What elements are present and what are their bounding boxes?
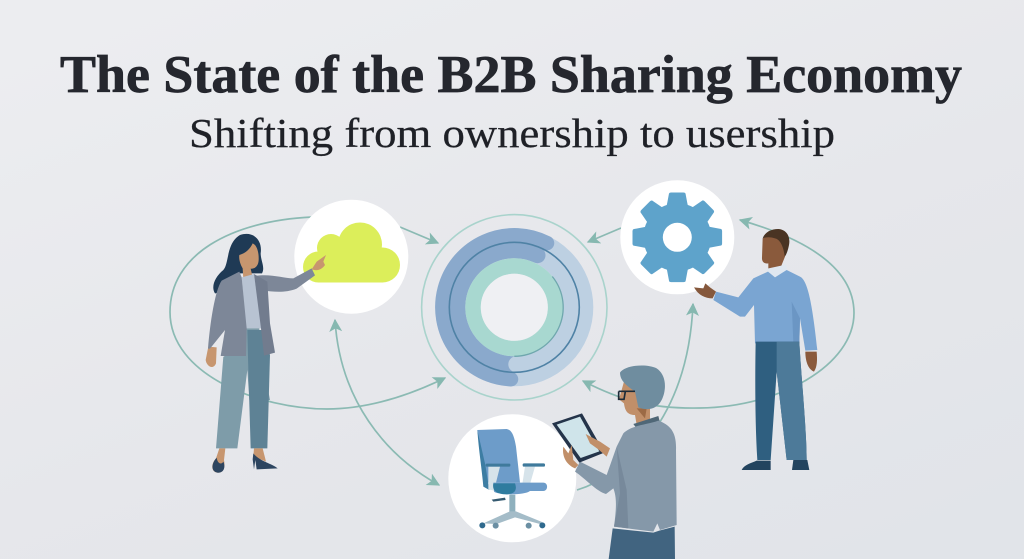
connecting arrows [170,217,854,490]
figure: man presenting gear [694,229,817,470]
central ring diagram [422,215,607,400]
figure: woman pointing at cloud [206,234,326,473]
title: The State of the B2B Sharing Economy [60,46,962,104]
icon: office chair [448,414,576,542]
subtitle: Shifting from ownership to usership [189,110,835,156]
icon: gear [620,180,734,294]
icon: cloud [294,200,408,314]
figure: person with tablet [552,365,677,559]
